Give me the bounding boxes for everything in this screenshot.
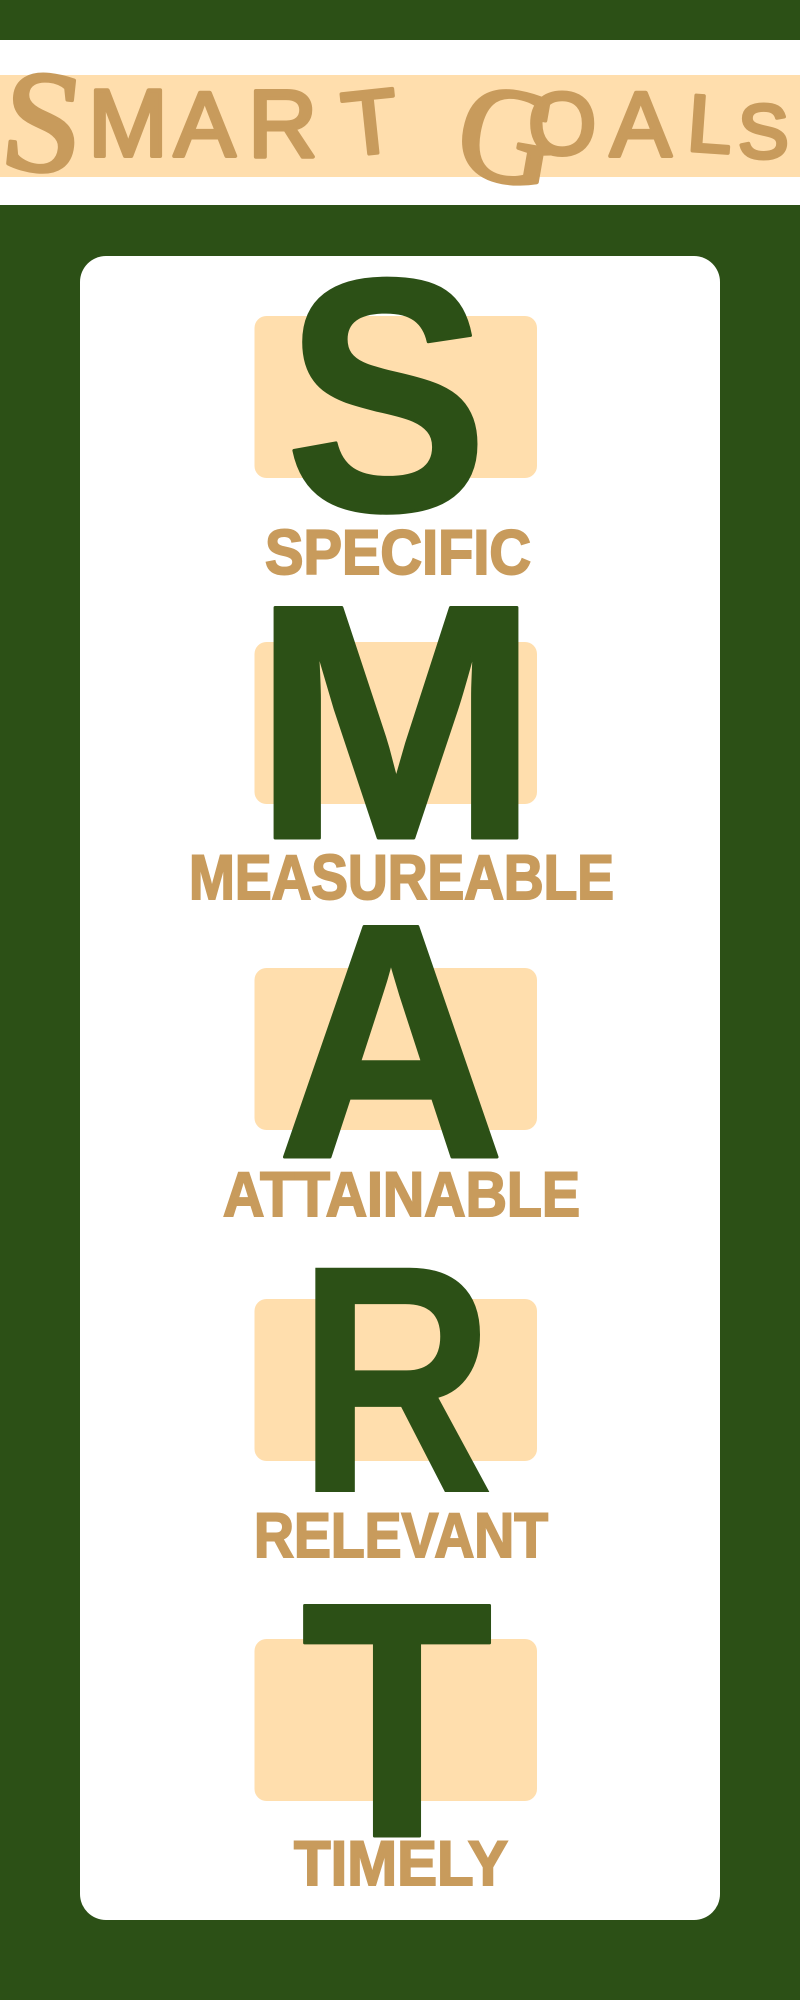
A block: A (276, 854, 506, 1228)
T block: T (301, 1533, 493, 1907)
panel: SMART card (80, 210, 720, 1920)
A block (223, 854, 580, 1230)
M block: M (252, 535, 540, 909)
title: O (528, 74, 596, 173)
S block: S (285, 210, 488, 581)
label: timely: TIMELY (294, 1829, 508, 1899)
title: A (610, 74, 672, 176)
title: T (338, 71, 403, 176)
title: M (88, 70, 168, 177)
M block (189, 535, 614, 913)
title: R (248, 71, 317, 178)
title: L (685, 78, 735, 170)
label: relevant: RELEVANT (254, 1501, 548, 1571)
label: specific: SPECIFIC (265, 518, 531, 588)
title banner (0, 39, 800, 219)
title: S (738, 90, 789, 175)
title: A (174, 74, 236, 176)
label: attainable: ATTAINABLE (223, 1160, 580, 1230)
R block: R (297, 1198, 495, 1562)
label: measureable: MEASUREABLE (189, 843, 614, 913)
title: G (447, 54, 570, 219)
